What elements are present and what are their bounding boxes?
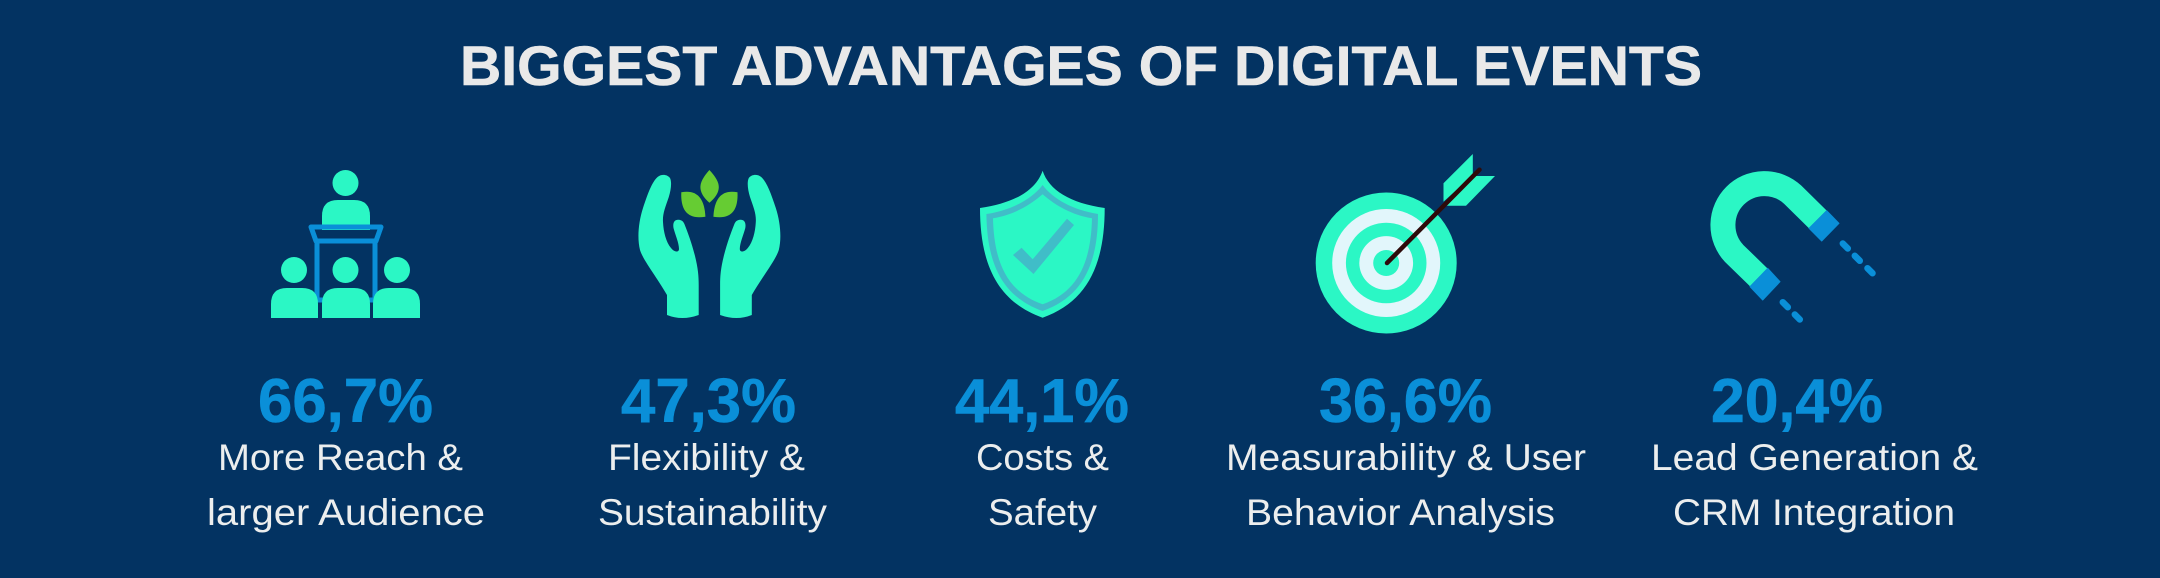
statistic: 66,7% (258, 367, 433, 436)
label: Behavior Analysis (1246, 492, 1555, 533)
label: Safety (988, 492, 1098, 533)
label: Sustainability (598, 492, 828, 533)
label (598, 437, 828, 533)
label: Lead Generation & (1651, 437, 1978, 478)
statistic: 44,1% (955, 367, 1129, 436)
statistic: 36,6% (1319, 367, 1492, 436)
label: Flexibility & (608, 437, 805, 478)
icon: target with arrow (1316, 154, 1495, 334)
panel: more reach and larger audience (207, 170, 485, 533)
panel: measurability and user behavior analysis (1226, 154, 1586, 533)
icon: shield with check mark (980, 171, 1105, 318)
title: BIGGEST ADVANTAGES OF DIGITAL EVENTS (460, 34, 1702, 97)
label (1226, 437, 1586, 533)
label (976, 437, 1109, 533)
statistic: 20,4% (1711, 367, 1883, 436)
panel: costs and safety (955, 171, 1129, 533)
label: CRM Integration (1673, 492, 1955, 533)
icon: magnet (1723, 184, 1872, 320)
icon: hands holding leaves (638, 170, 780, 318)
panel: lead generation and CRM integration (1651, 184, 1978, 533)
label: More Reach & (218, 437, 463, 478)
icon: speaker at podium with audience (271, 170, 420, 318)
label (207, 437, 485, 533)
label: Measurability & User (1226, 437, 1586, 478)
label: Costs & (976, 437, 1109, 478)
panel: flexibility and sustainability (598, 170, 828, 533)
label (1651, 437, 1978, 533)
statistic: 47,3% (621, 367, 796, 436)
label: larger Audience (207, 492, 485, 533)
